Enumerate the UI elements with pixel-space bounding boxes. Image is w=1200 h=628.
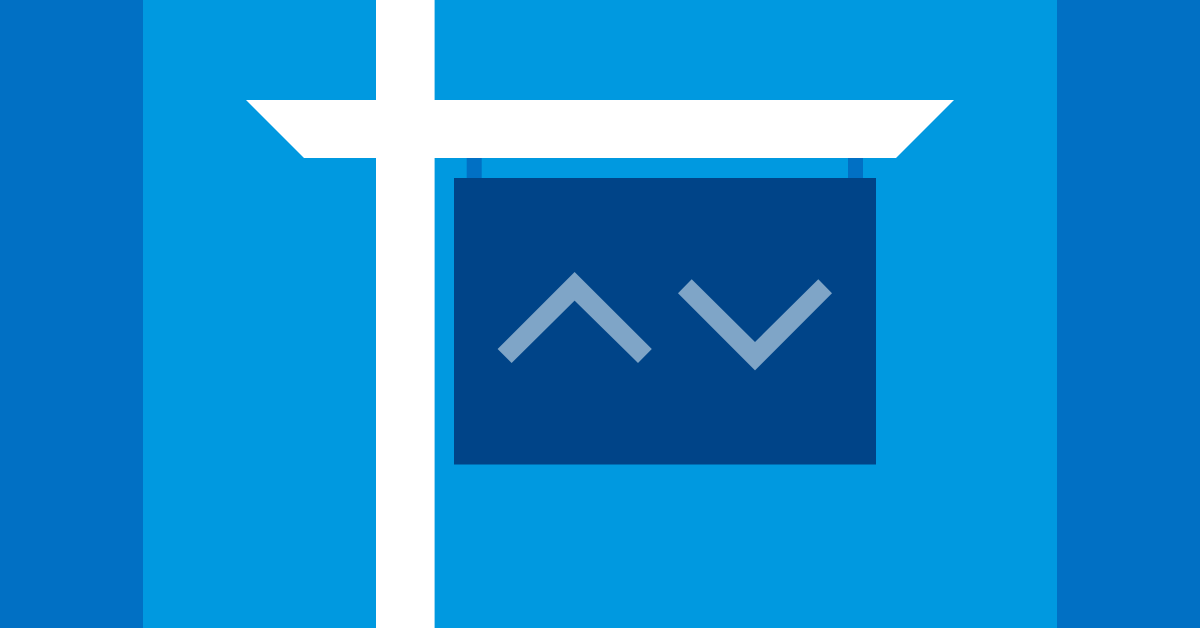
right side band <box>1057 0 1200 628</box>
icon: down chevron <box>678 279 832 370</box>
icon: up chevron <box>498 272 652 363</box>
sign board <box>454 178 876 464</box>
sign post <box>246 0 954 628</box>
left side band <box>0 0 143 628</box>
left hanger <box>467 158 482 178</box>
right hanger <box>848 158 863 178</box>
